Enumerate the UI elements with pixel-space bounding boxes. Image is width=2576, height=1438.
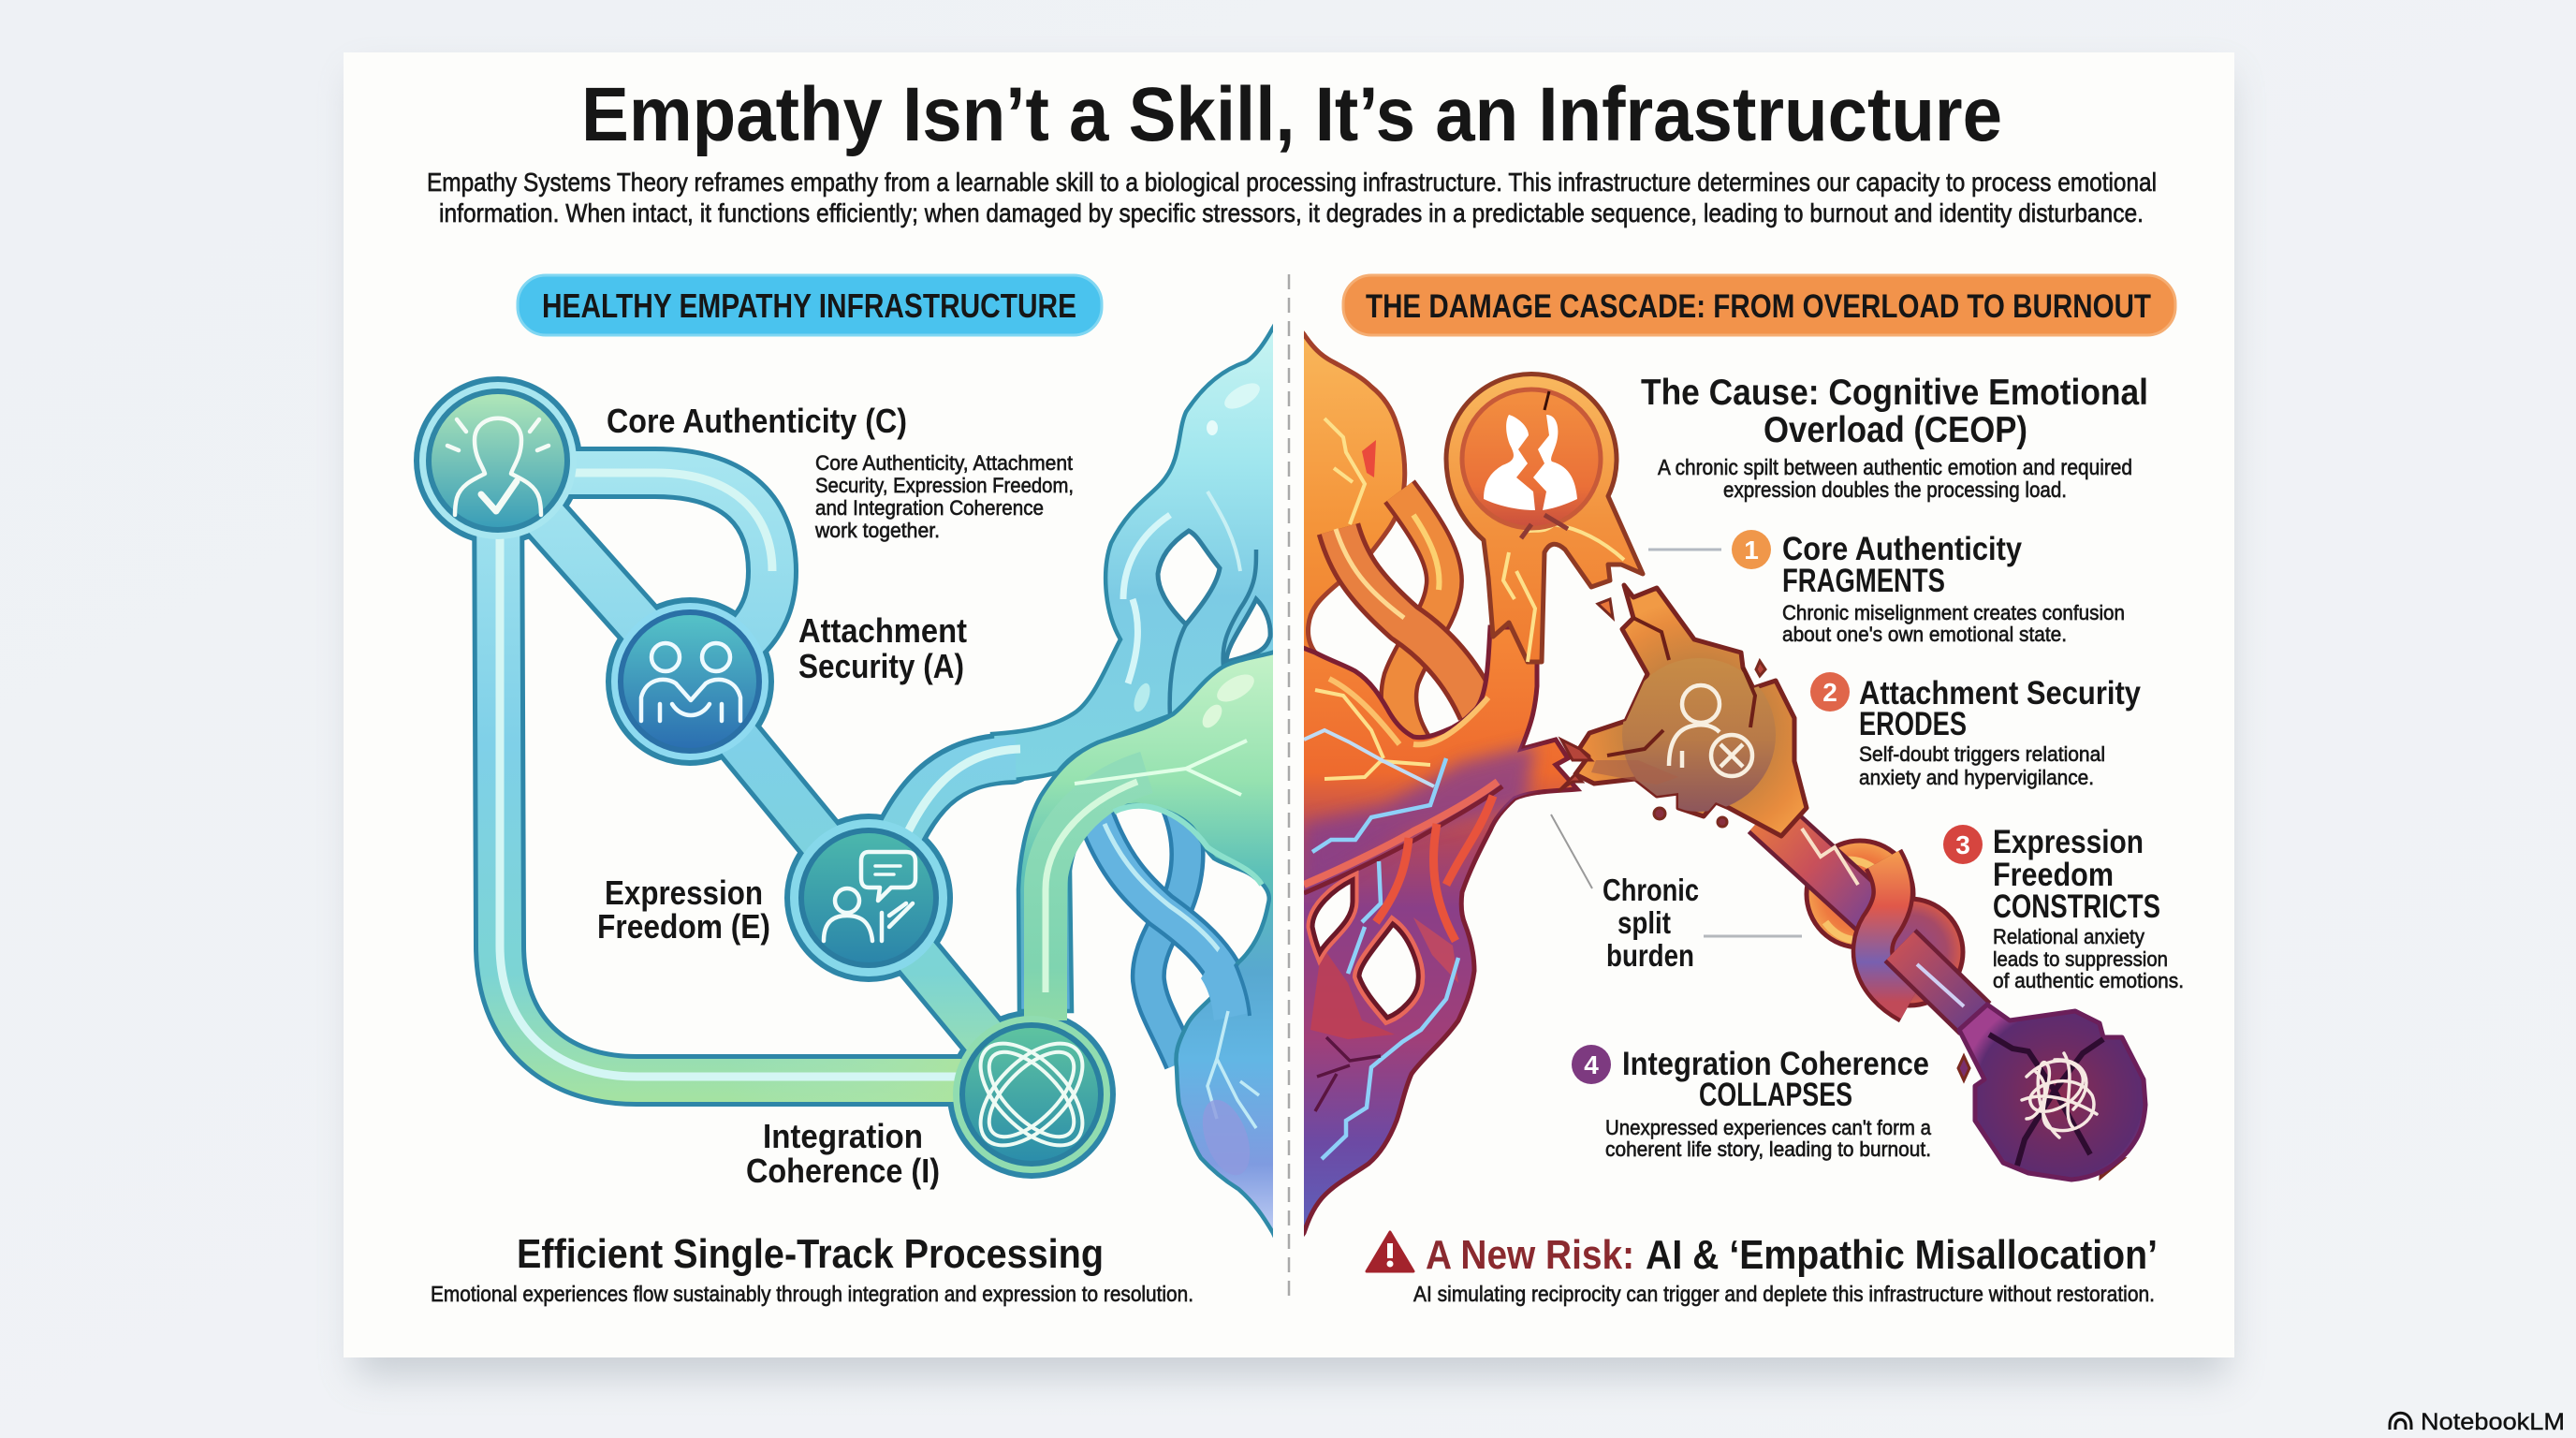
label: expression freedom: Freedom (E) [597,907,770,946]
description: components work together [814,451,1074,542]
label: integration coherence: Coherence (I) [746,1152,940,1190]
step 4 [1572,1045,1932,1161]
callout: chronic split burden: split [1617,905,1671,940]
node: expression freedom [790,819,947,976]
step 4: Integration Coherence [1622,1046,1929,1082]
description: components work together: Core Authenticity, Attachment [815,451,1074,475]
lower red-purple mass [1298,627,1577,1240]
description: the cause: A chronic spilt between authentic emotion and required [1658,455,2132,479]
badge 4 [1572,1045,1611,1084]
network pipe fills [498,465,1032,1094]
title: Empathy Isn’t a Skill, It’s an Infrastructure [581,72,2002,157]
step 3: Expression [1993,824,2144,860]
step 1: about one's own emotional state. [1782,623,2067,646]
description: the cause [1658,455,2132,502]
label: integration coherence [746,1117,940,1190]
step 1: Chronic miselignment creates confusion [1782,601,2125,624]
description: components work together: work together. [814,519,940,542]
brand mark: NotebookLM [2421,1409,2565,1435]
icon: fractured person [1484,415,1577,510]
network pipe outlines [440,403,1090,1152]
panel: damage cascade [1298,275,2184,1306]
badge 3 [1943,825,1983,864]
heading: the cause: The Cause: Cognitive Emotional [1641,373,2148,413]
footer: new risk [1367,1232,2158,1306]
panel: healthy empathy infrastructure [419,275,1279,1306]
description: components work together: Security, Expression Freedom, [815,474,1074,497]
step 4: coherent life story, leading to burnout. [1605,1137,1931,1161]
heading: the cause [1641,373,2148,450]
step 1: Core Authenticity [1782,531,2022,567]
step 3: of authentic emotions. [1993,969,2184,992]
twisted strands [1336,492,1479,744]
step 2: ERODES [1859,706,1967,742]
badge 3: 3 [1955,830,1970,859]
heading pill: healthy [518,275,1102,335]
liquid braids behind blob [1095,805,1250,1063]
badge 2: 2 [1822,678,1837,707]
node 1: fragmented authenticity [1462,389,1601,538]
broken branch tips [1559,740,1591,791]
icon: notebook arcs [2390,1413,2411,1430]
burning liquid mass [1298,328,1577,1240]
footer: efficient processing: Emotional experiences flow sustainably through integration and expression to resolution. [431,1282,1193,1306]
heading: the cause: Overload (CEOP) [1764,410,2027,450]
icon: two people connected [641,643,740,721]
intro text [427,168,2157,227]
stem cracks [1503,524,1624,662]
badge 1 [1732,530,1771,569]
step 2 [1810,672,2141,789]
icon: person with crossed circle [1669,685,1752,776]
footer: new risk: A New Risk: [1426,1232,1634,1278]
footer: efficient processing [431,1231,1193,1306]
step 3 [1943,824,2184,992]
heading pill: healthy: HEALTHY EMPATHY INFRASTRUCTURE [542,286,1076,325]
knotted constricted pipe [1764,814,1975,1019]
step 1 [1648,530,2125,646]
callout: chronic split burden [1551,814,1802,973]
heading pill: damage [1343,275,2175,335]
card shadow [356,75,2228,1376]
callout: chronic split burden: Chronic [1603,873,1699,907]
card [344,52,2234,1357]
icon: tangled threads [2022,1053,2097,1137]
fragments [1598,599,2123,1178]
callout: chronic split burden: burden [1606,938,1694,973]
step 3: leads to suppression [1993,947,2168,971]
label: attachment security: Attachment [798,611,967,650]
heading pill: damage: THE DAMAGE CASCADE: FROM OVERLOAD TO BURNOUT [1366,288,2151,325]
badge 1: 1 [1744,536,1759,565]
badge 4: 4 [1584,1050,1599,1079]
intro text: Empathy Systems Theory reframes empathy from a learnable skill to a biological processing infrastructure. This infrastructure determines our capacity to process emotional [427,168,2157,197]
footer: new risk: AI & ‘Empathic Misallocation’ [1646,1232,2158,1278]
stem and node 1 body [1446,374,1643,662]
footer: new risk: AI simulating reciprocity can trigger and deplete this infrastructure without restoration. [1413,1282,2155,1306]
badge 2 [1810,672,1850,712]
node 2: eroding attachment [1575,585,1807,836]
step 2: anxiety and hypervigilance. [1859,766,2094,789]
upper cyan liquid blob [992,318,1279,783]
intro text: information. When intact, it functions efficiently; when damaged by specific stressors, it degrades in a predictable sequence, leading to burnout and identity disturbance. [439,198,2144,227]
icon: interlaced knot [962,1025,1101,1164]
central dashed divider [1288,274,1290,1301]
step 3: Relational anxiety [1993,925,2144,948]
icon: warning triangle [1367,1232,1413,1271]
node: core authenticity [419,382,577,539]
label: integration coherence: Integration [763,1117,923,1155]
step 1: FRAGMENTS [1782,563,1945,599]
step 4: COLLAPSES [1699,1077,1852,1113]
step 2: Attachment Security [1859,675,2141,712]
burning blob top [1304,330,1408,652]
node 4: collapsed integration [1959,1005,2145,1180]
node: attachment security [611,603,768,760]
label: core authenticity: Core Authenticity (C) [607,402,907,440]
icon: person with checkmark [447,418,549,515]
description: components work together: and Integration Coherence [815,496,1044,520]
step 3: Freedom [1993,857,2114,893]
node: integration coherence [953,1016,1110,1173]
footer: efficient processing: Efficient Single-Track Processing [517,1231,1104,1277]
label: attachment security [798,611,967,685]
icon: person with speech bubble [824,852,915,941]
label: attachment security: Security (A) [798,647,964,685]
green-blue liquid mass [1018,651,1279,1245]
step 3: CONSTRICTS [1993,888,2160,925]
description: the cause: expression doubles the processing load. [1723,477,2067,502]
label: expression freedom [597,873,770,946]
step 2: Self-doubt triggers relational [1859,742,2105,766]
label: expression freedom: Expression [605,873,763,912]
step 4: Unexpressed experiences can't form a [1605,1116,1932,1139]
